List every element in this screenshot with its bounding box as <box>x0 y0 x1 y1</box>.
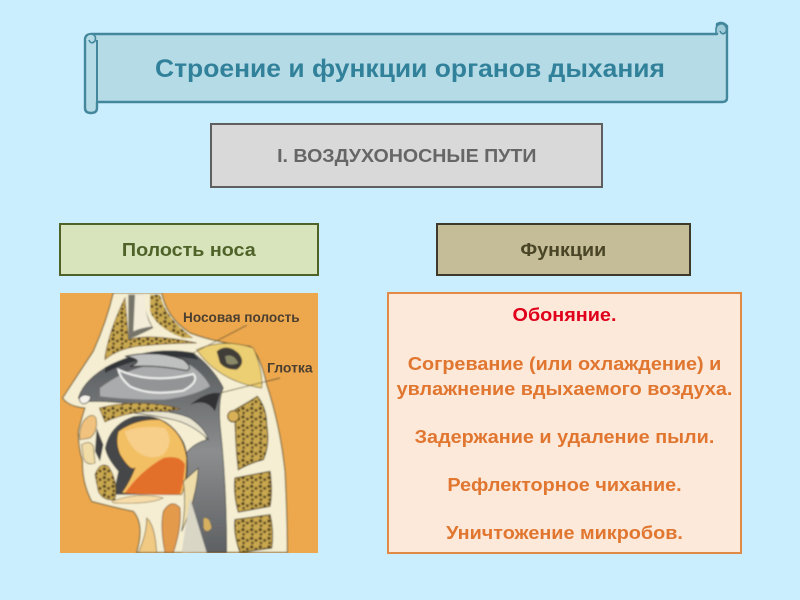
heading: nasal cavity <box>59 223 319 276</box>
jaw bone <box>95 465 116 500</box>
heading: airways: I. ВОЗДУХОНОСНЫЕ ПУТИ <box>277 144 536 166</box>
skull and neck bones <box>63 293 287 552</box>
anatomy illustration: nasal cavity and pharynx <box>60 293 318 553</box>
function: sneezing: Рефлекторное чихание. <box>447 474 682 495</box>
heading: functions <box>436 223 691 276</box>
panel: functions list <box>387 292 742 554</box>
leader lines <box>193 325 280 393</box>
heading: airways <box>210 123 603 188</box>
lips and chin <box>80 415 97 440</box>
floor of mouth <box>112 495 163 503</box>
oral cavity <box>105 416 188 495</box>
heading: nasal cavity: Полость носа <box>122 239 256 260</box>
function: smell: Обоняние. <box>513 304 616 325</box>
label: nasal cavity: Носовая полость <box>183 309 300 325</box>
function: warming and humidifying: увлажнение вдыхаемого воздуха. <box>397 378 732 399</box>
epiglottis and larynx <box>182 468 198 531</box>
sphenoid sinus <box>197 343 262 388</box>
vertebrae <box>235 396 268 470</box>
nasal turbinates <box>125 354 189 371</box>
nostril <box>79 395 91 404</box>
frontal bone <box>105 298 197 360</box>
label: pharynx: Глотка <box>267 359 313 375</box>
function: warming and humidifying <box>396 353 732 399</box>
title scroll banner: Строение и функции органов дыхания <box>155 55 665 83</box>
function: dust removal: Задержание и удаление пыли. <box>415 426 714 447</box>
function: killing microbes: Уничтожение микробов. <box>446 522 683 543</box>
nasal cavity and pharynx <box>78 351 227 552</box>
hard palate <box>99 403 180 422</box>
heading: functions: Функции <box>521 239 606 260</box>
tongue <box>117 419 187 495</box>
soft palate <box>133 411 208 440</box>
function: warming and humidifying: Согревание (или охлаждение) и <box>408 353 721 374</box>
